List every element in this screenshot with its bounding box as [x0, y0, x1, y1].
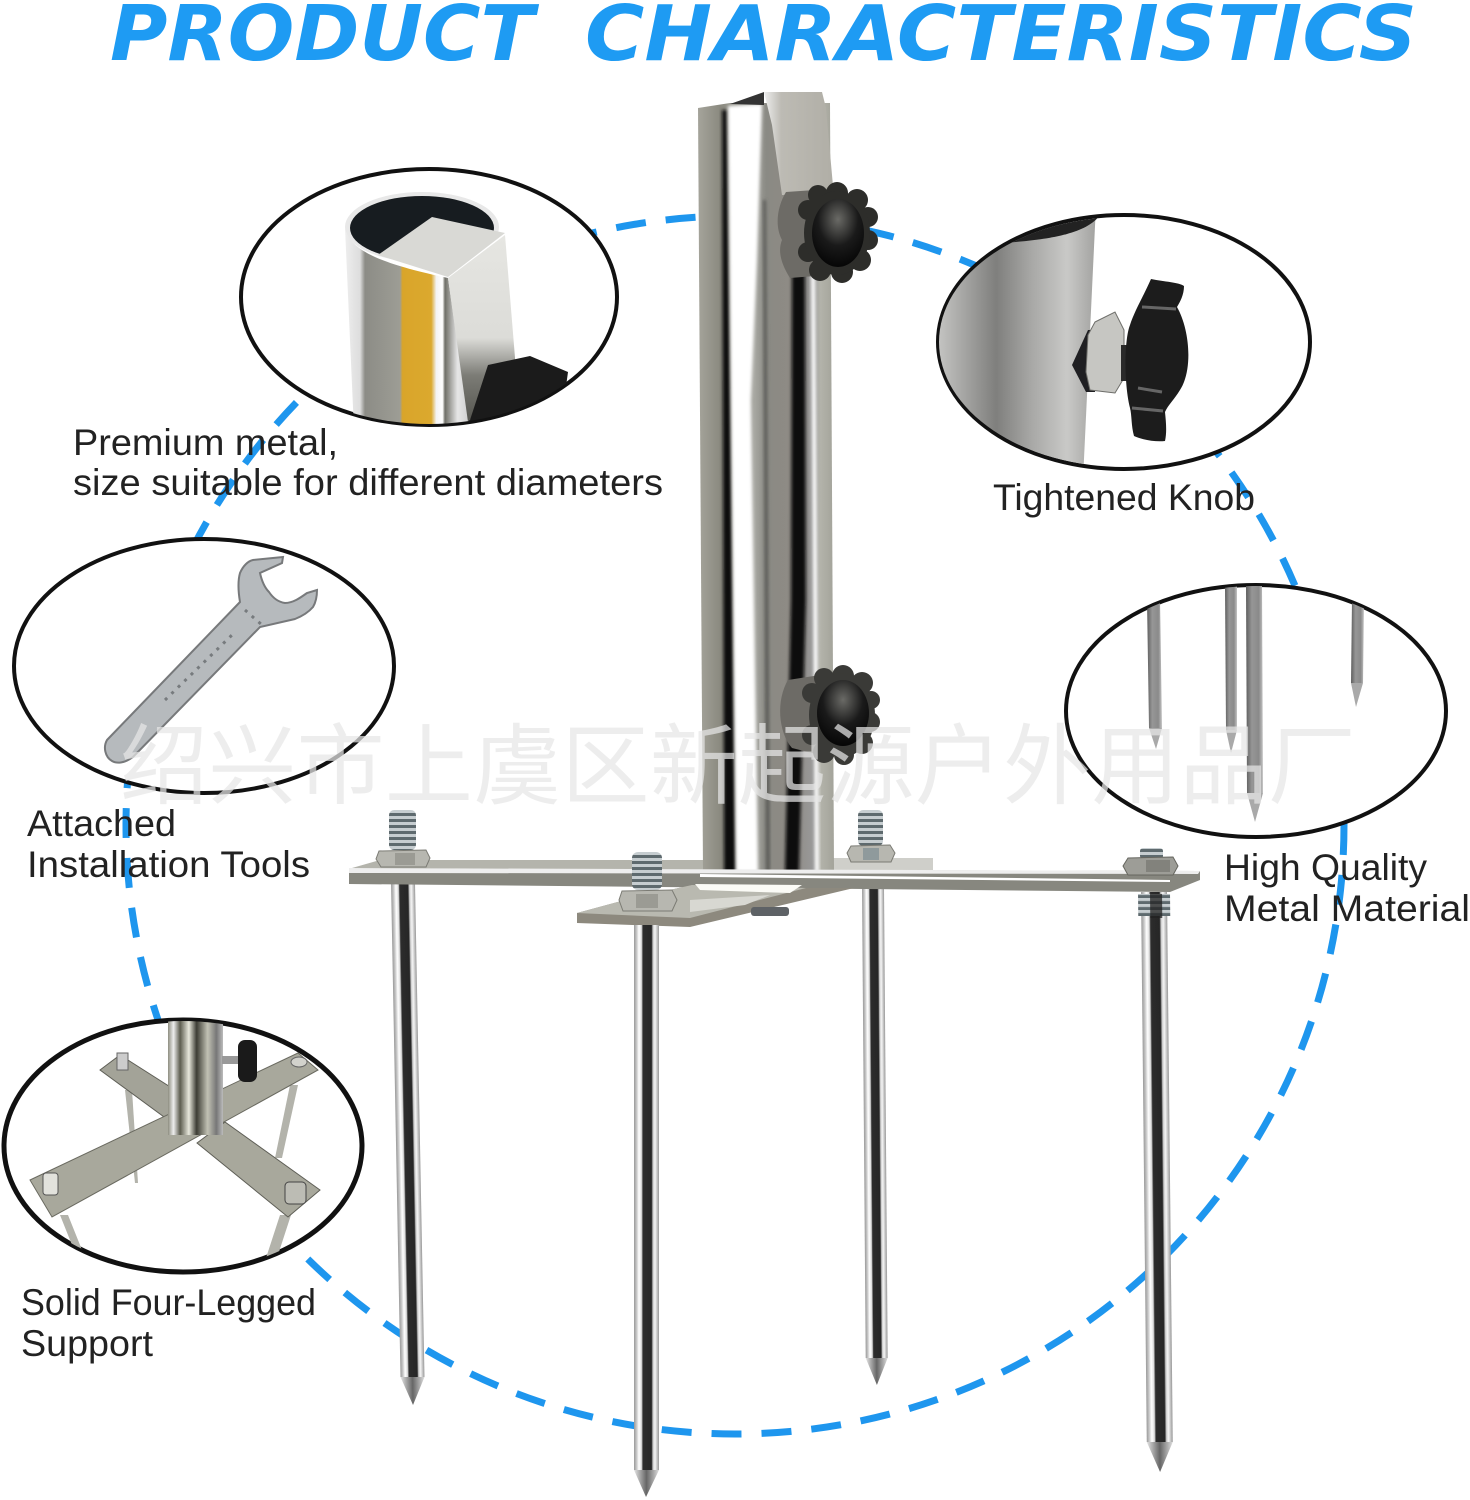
right spike [1138, 892, 1176, 1472]
clamp bracket at tube top [730, 92, 833, 195]
label: solid four-legged: Solid Four-Legged [21, 1282, 316, 1323]
callout: four-legged support [4, 1015, 362, 1272]
umbrella tube [698, 103, 834, 872]
main product: umbrella ground stand [349, 92, 1200, 1497]
middle rear spike [862, 888, 888, 1385]
label: metal material: Metal Material [1224, 888, 1470, 929]
callout: tube close-up [241, 169, 617, 430]
dashed ring connecting the feature callouts [126, 216, 1344, 1434]
label: installation tools: Installation Tools [27, 844, 310, 885]
label: premium metal: Premium metal, [73, 422, 338, 463]
left rear spike [391, 883, 425, 1405]
front spike [634, 925, 659, 1497]
title [110, 0, 1417, 79]
main cross bar [349, 868, 1200, 892]
bolts [376, 810, 1178, 911]
watermark: 绍兴市上虞区新起源户外用品厂 [120, 717, 1356, 816]
lower knob [780, 665, 880, 765]
upper knob [778, 182, 878, 283]
callout: spikes close-up [1066, 585, 1446, 837]
front plate [577, 884, 854, 927]
label: high quality: High Quality [1224, 847, 1428, 888]
label: support: Support [21, 1323, 154, 1364]
callout: knob close-up [930, 200, 1310, 480]
callout: wrench [14, 539, 394, 793]
label: size suitable: size suitable for different diameters [73, 462, 663, 503]
rear top faces of cross plates [352, 858, 933, 873]
label: tightened knob: Tightened Knob [993, 477, 1255, 518]
label: attached: Attached [27, 803, 176, 844]
